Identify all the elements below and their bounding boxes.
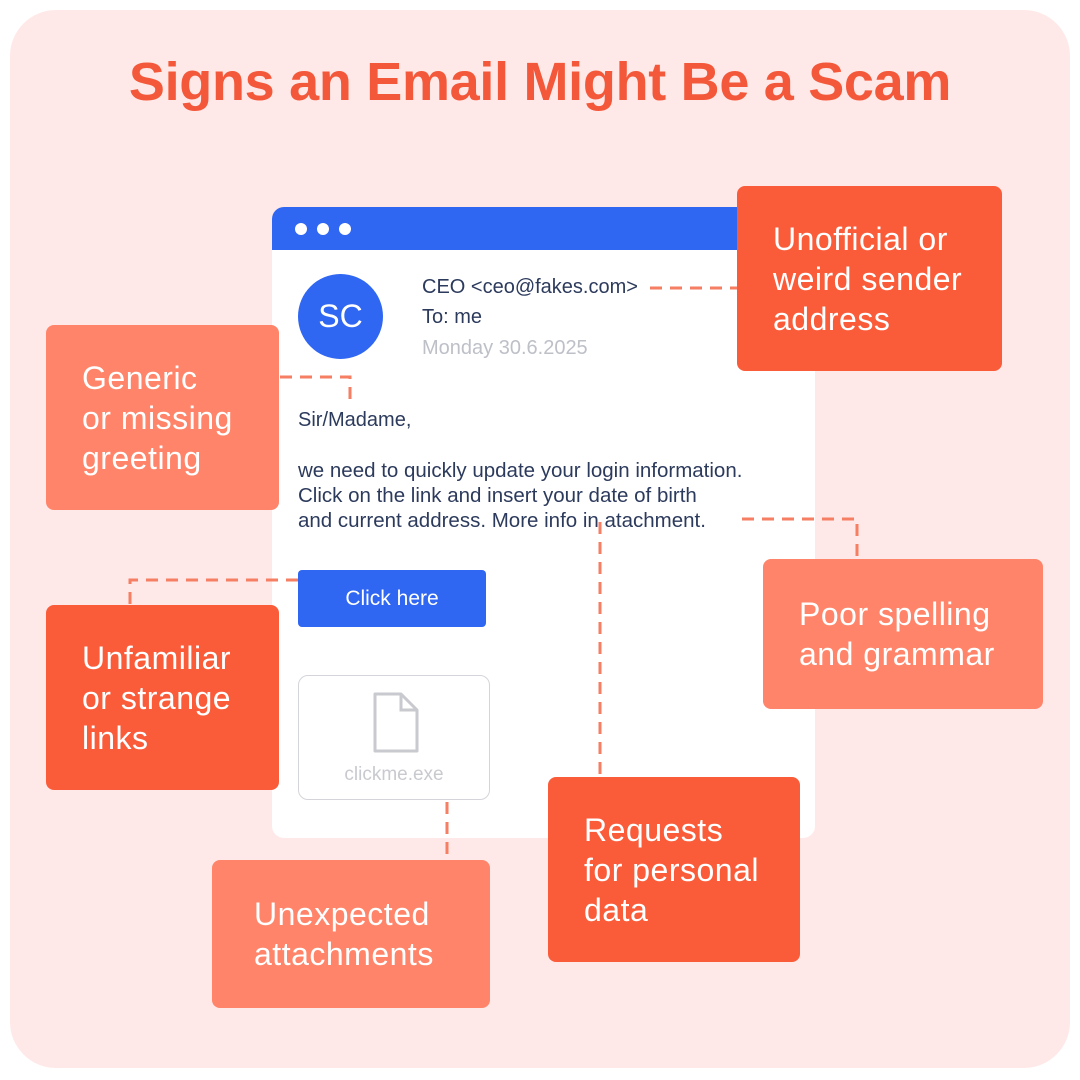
sender info: CEO <ceo@fakes.com> bbox=[422, 276, 638, 298]
callout: sender: address bbox=[773, 300, 890, 336]
callout: links: or strange bbox=[82, 680, 231, 716]
callout: sender: weird sender bbox=[773, 260, 962, 296]
text: Click on the link and insert your date of birth bbox=[298, 484, 697, 507]
callout: attachments bbox=[212, 860, 490, 1008]
email window bbox=[272, 207, 815, 838]
text: and current address. More info in atachment. bbox=[298, 509, 706, 532]
button: click here: Click here bbox=[345, 587, 439, 610]
callout: attachments: attachments bbox=[254, 936, 434, 972]
callout: personal data: Requests bbox=[584, 812, 723, 848]
text: To: me bbox=[422, 306, 482, 328]
callout: spelling bbox=[763, 559, 1043, 709]
email body: Sir/Madame, bbox=[298, 409, 411, 431]
avatar bbox=[298, 274, 383, 359]
attachment: clickme.exe bbox=[344, 764, 444, 785]
attachment bbox=[298, 675, 490, 800]
button: click here bbox=[298, 570, 486, 627]
callout: personal data: data bbox=[584, 892, 648, 928]
callout: greeting: or missing bbox=[82, 400, 233, 436]
callout: sender bbox=[737, 186, 1002, 371]
callout: sender: Unofficial or bbox=[773, 220, 948, 256]
callout: greeting: Generic bbox=[82, 360, 198, 396]
icon: file bbox=[374, 692, 418, 752]
callout: greeting: greeting bbox=[82, 440, 202, 476]
callout: personal data: for personal bbox=[584, 852, 759, 888]
callout: spelling: and grammar bbox=[799, 636, 995, 672]
text: Monday 30.6.2025 bbox=[422, 337, 588, 359]
window header bbox=[272, 207, 815, 250]
callout: links: Unfamiliar bbox=[82, 640, 231, 676]
callout: spelling: Poor spelling bbox=[799, 596, 990, 632]
text: we need to quickly update your login information. bbox=[298, 459, 742, 482]
callout: personal data bbox=[548, 777, 800, 962]
callout: attachments: Unexpected bbox=[254, 896, 430, 932]
callout: links: links bbox=[82, 720, 149, 756]
avatar: SC bbox=[318, 298, 363, 334]
callout: links bbox=[46, 605, 279, 790]
callout: greeting bbox=[46, 325, 279, 510]
title: Signs an Email Might Be a Scam bbox=[129, 52, 951, 112]
